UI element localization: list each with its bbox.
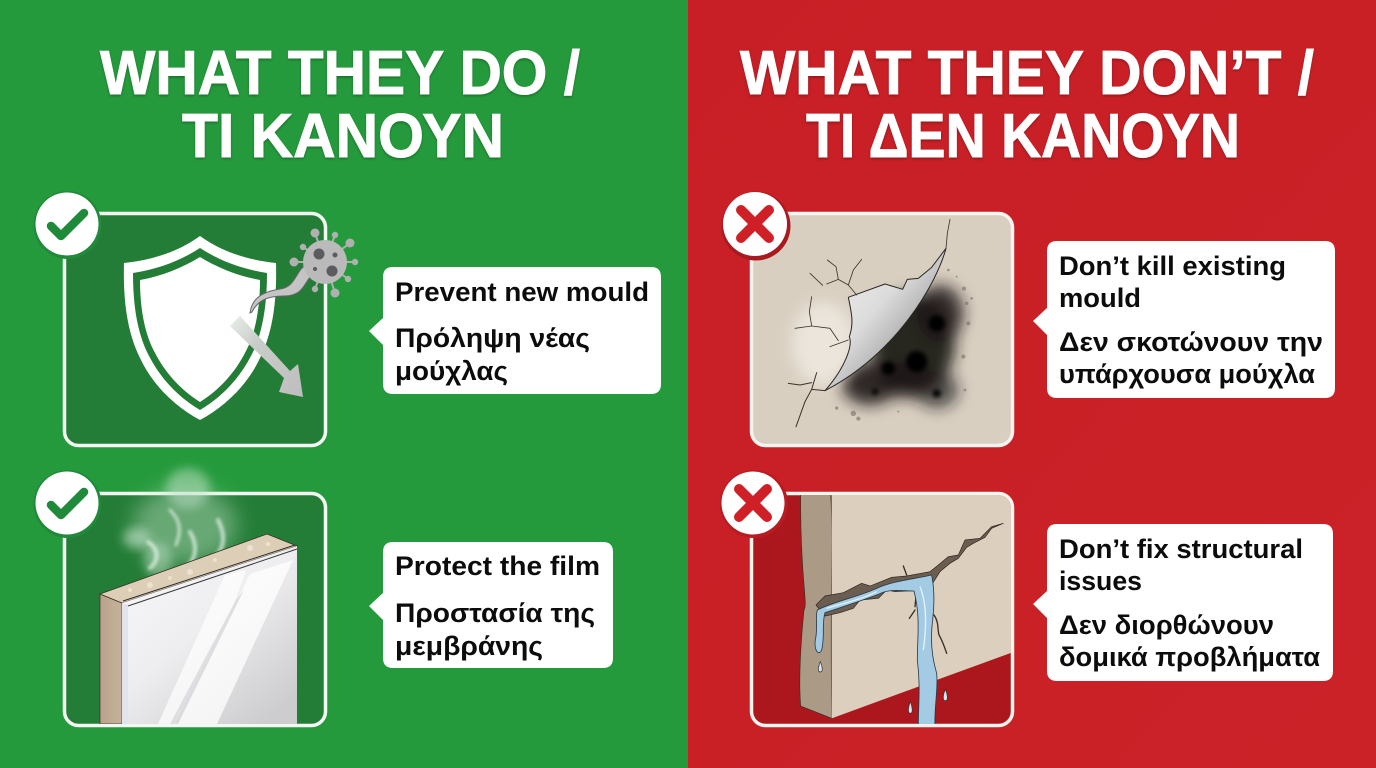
icon: red cross badge [720, 470, 788, 538]
illustration: wall edge [800, 493, 832, 718]
heading: what they do: WHAT THEY DO / [100, 39, 580, 108]
illustration: laminated board [100, 534, 297, 724]
illustration: pale plaster [792, 302, 855, 385]
panel: don't kill existing mould [752, 214, 1012, 446]
callout: don't kill existing mould: υπάρχουσα μούχλα [1059, 359, 1315, 389]
icon: shield [124, 236, 276, 420]
panel: green background [0, 0, 688, 768]
callout: protect the film: Protect the film [395, 551, 600, 581]
heading: what they don't [740, 39, 1314, 171]
illustration: crack [816, 523, 1003, 616]
callout: prevent new mould: μούχλας [395, 356, 508, 386]
callout: protect the film: μεμβράνης [395, 631, 543, 661]
heading: what they do [100, 39, 580, 171]
panel: red background [688, 0, 1376, 768]
callout: prevent new mould: Prevent new mould [395, 277, 649, 307]
callout: don't fix structural issues: issues [1059, 566, 1142, 596]
callout: protect the film: Προστασία της [395, 598, 595, 628]
illustration: vapour rising [123, 468, 237, 578]
panel: don't fix structural issues [752, 493, 1012, 727]
callout: don't kill existing mould: Don’t kill existing [1059, 251, 1286, 281]
callout: don't fix structural issues [1033, 524, 1333, 681]
illustration: black mould [835, 269, 973, 421]
heading: what they do: ΤΙ ΚΑΝΟΥΝ [182, 102, 504, 171]
callout: don't fix structural issues: Δεν διορθώνουν [1059, 610, 1274, 640]
callout: prevent new mould: Πρόληψη νέας [395, 323, 590, 353]
heading: what they don't: WHAT THEY DON’T / [740, 39, 1314, 108]
illustration: peeled corner [825, 248, 946, 391]
icon: red cross badge [722, 192, 790, 260]
illustration: water leak [815, 575, 937, 727]
icon: mould spore [250, 230, 357, 313]
callout: don't kill existing mould: Δεν σκοτώνουν την [1059, 327, 1323, 357]
callout: don't fix structural issues: δομικά προβλήματα [1059, 642, 1320, 672]
callout: prevent new mould [369, 267, 661, 394]
icon: green check badge [34, 191, 102, 259]
illustration: wall cracks [788, 219, 950, 427]
callout: don't kill existing mould [1033, 241, 1335, 398]
heading: what they don't: ΤΙ ΔΕΝ ΚΑΝΟΥΝ [806, 102, 1240, 171]
panel: prevent new mould [64, 214, 357, 446]
illustration: wall face [832, 493, 1012, 718]
callout: protect the film [369, 542, 613, 668]
callout: don't kill existing mould: mould [1059, 283, 1141, 313]
illustration: cracked wall with leak [800, 493, 1012, 727]
panel: protect the film [64, 468, 326, 726]
icon: green check badge [34, 470, 102, 538]
illustration: water drops [818, 662, 947, 713]
icon: deflection arrow [230, 316, 303, 397]
callout: don't fix structural issues: Don’t fix structural [1059, 534, 1303, 564]
illustration: mould patch and peeling plaster [788, 219, 973, 427]
